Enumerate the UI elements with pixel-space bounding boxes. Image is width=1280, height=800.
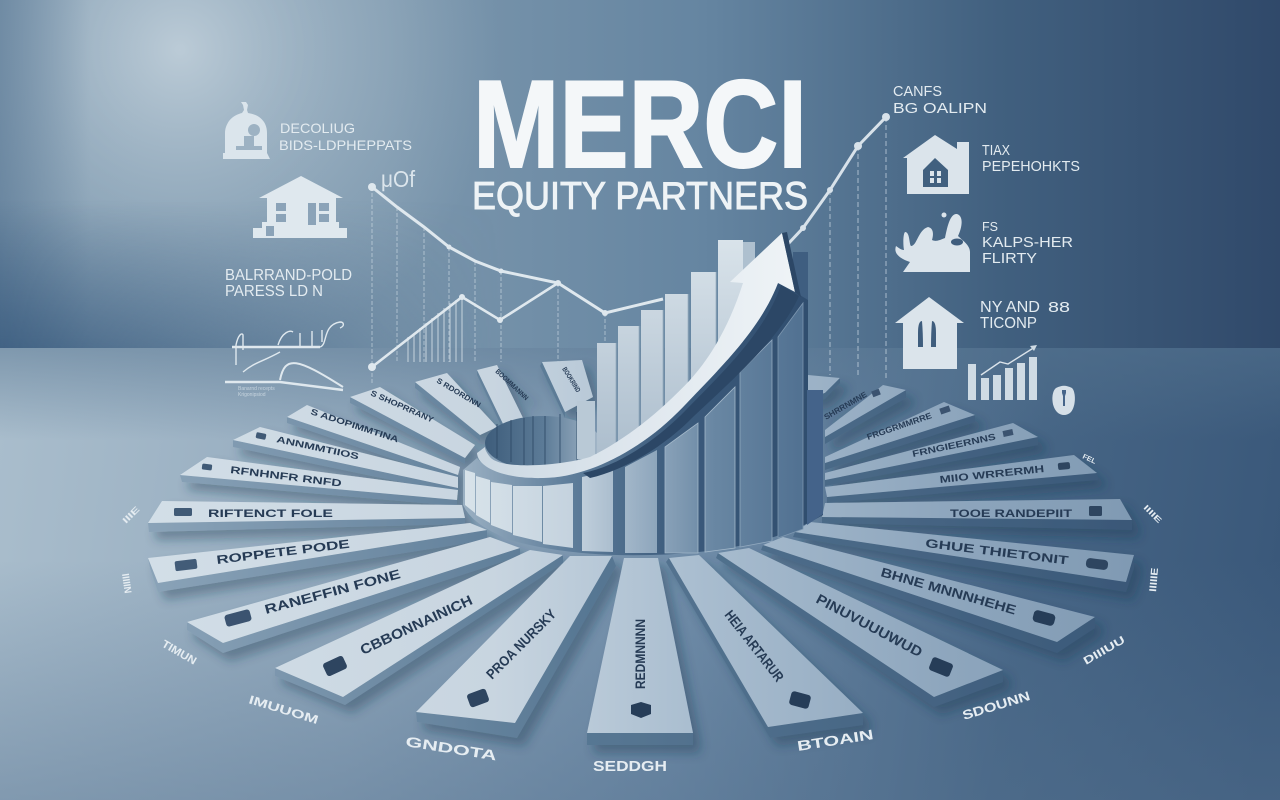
label: top right: BG OALIPN [893,100,987,117]
slab: back left 10: S RDORDNN [435,376,482,409]
slab: left 1 [416,556,616,738]
outer fan labels: SEDDGH [593,758,667,775]
label: top left: DECOLIUG [280,120,355,136]
slab: back left 9: S SHOPRRANY [369,389,436,425]
label: middle left: PARESS LD N [225,283,323,300]
label: top left [279,120,412,153]
outer wall [463,283,823,555]
label: tax [982,142,1080,175]
outer fan labels: GNDOTA [405,733,498,763]
label: top right [893,83,987,117]
slab: right 5: TOOE RANDEPIIT [950,508,1072,520]
central growth structure [463,232,823,555]
label: top left: BIDS-LDPHEPPATS [279,137,412,153]
outer fan labels: IIIE [121,504,142,525]
arrow head fold [782,232,801,297]
slab: right 3 [761,537,1095,653]
slab: bottom centre: REDMNNNN [632,619,648,689]
outer fan labels: IMUUOM [247,692,320,727]
slab: left 5 [148,501,465,532]
slab: right 1: HEIA ARTARUR [722,607,787,685]
slab: right 3: BHNE MNNNHEHE [879,564,1018,618]
background wall [0,0,1280,349]
outer fan labels: IIIIIE [1148,567,1161,592]
slab: back left 6: RFNHNFR RNFD [230,465,342,490]
label: middle left: BALRRAND-POLD [225,267,352,284]
slab: left 3 [187,537,520,653]
icon: sketch diagram [225,322,343,398]
outer fan labels: DIIIUU [1082,634,1127,668]
slab: back right 9 [822,385,906,444]
label: kalps: FLIRTY [982,250,1037,267]
icon: house with arches [895,297,964,369]
slab: back left 7: ANNMMTIIOS [276,434,360,461]
slab: right 2: PINUVUUUWUD [814,591,925,660]
slab: back left 9 [350,387,475,464]
slab: right 2 [716,548,1003,707]
slab: right 4: GHUE THIETONIT [925,536,1070,568]
front bars [465,303,823,553]
slab: right 4 [793,522,1134,592]
slab: back left 11: BOOMMANNN [494,368,529,402]
slab: back left 8 [287,405,460,481]
slab: back left 11 [477,365,529,434]
ring hole [485,401,601,470]
slab: back left 7 [233,427,458,494]
icon: house with window [903,135,969,194]
slab: back right 6: MIIO WRRERMH [939,464,1045,486]
rising arrow [477,233,795,478]
chart mark: μOf [381,166,416,192]
rising back bars [597,240,808,468]
outer fan labels: IIIIIN [119,573,133,594]
radial fan of slabs [148,360,1134,745]
label: ny and [980,299,1070,332]
label: top right: CANFS [893,83,942,100]
slab: back right 6 [825,455,1098,503]
slab: right 1 [666,555,863,738]
icon: landscape silhouette [895,212,970,272]
slab: left 4 [148,523,487,592]
slab: back left 12 [540,360,593,418]
icon: cloche [223,102,270,159]
title: EQUITY PARTNERS [472,175,808,218]
label: tax: TIAX [982,142,1010,159]
slab: left 2: CBBONNAINICH [358,592,475,658]
outer fan labels: BTOAIN [796,726,875,754]
label: middle left [225,267,352,300]
slab: left 4: ROPPETE PODE [216,537,350,567]
slab: back right 10 [808,375,840,404]
left line chart [368,183,663,385]
slab: back right 7: FRNGIEERNNS [911,432,997,459]
slab: back left 10 [415,373,497,441]
label: ny and: NY AND [980,299,1040,316]
right line chart [788,113,890,380]
label: tax: PEPEHOHKTS [982,158,1080,175]
icon: sketch diagram: Banarnd recepts [238,386,275,392]
slab: left 3: RANEFFIN FONE [263,566,402,617]
outer fan labels: IIIIE [1142,503,1164,526]
slab: back right 7 [825,423,1038,486]
slab: left 2 [275,550,563,705]
slab: back left 12: BOOKRIND [560,366,581,394]
slab: back left 8: S ADOPIMMTINA [309,406,400,444]
slab: back right 8 [825,402,975,470]
slab: bottom centre [587,558,693,745]
icon: mini bar chart [968,345,1037,400]
background floor [0,348,1280,800]
slab: back right 9: SHRRNMNE [822,390,869,422]
label: ny and: 88 [1048,299,1070,316]
icon: sketch diagram: Krigonipsiod [238,392,266,398]
outer fan labels: SDOUNN [960,688,1032,723]
label: kalps [982,219,1073,267]
icon: bank house [253,176,347,238]
slab: back right 8: FRGGRMMRRE [865,410,933,442]
label: ny and: TICONP [980,315,1037,332]
outer fan labels [119,453,1164,775]
slab: left 5: RIFTENCT FOLE [208,508,333,520]
label: kalps: KALPS-HER [982,234,1073,251]
title: MERCI [473,56,807,194]
label: kalps: FS [982,219,998,234]
slab: back left 6 [180,457,458,506]
outer fan labels: FEL [1081,453,1097,466]
slab: right 5 [822,499,1132,530]
icon: apple token [1052,386,1075,415]
outer fan labels: TIMUN [160,638,198,668]
slab: left 1: PROA NURSKY [483,605,560,682]
ribbon underside [583,285,799,478]
